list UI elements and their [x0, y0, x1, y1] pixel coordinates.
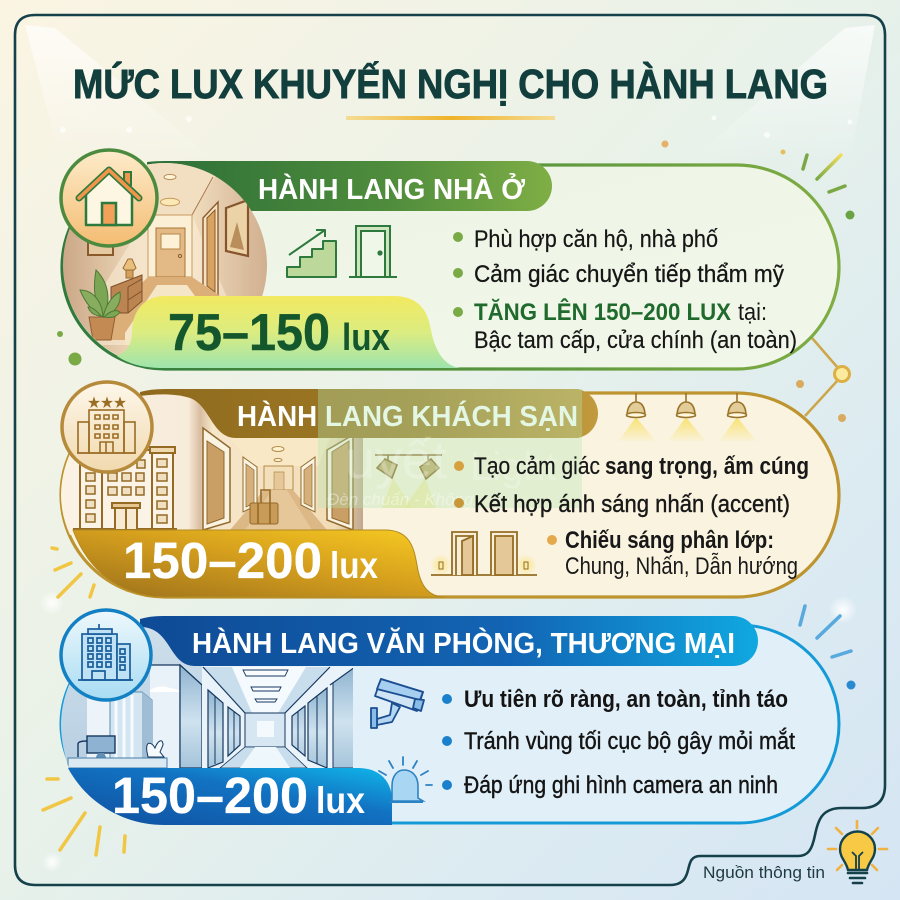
icon: office badge: [61, 610, 151, 700]
header band: [140, 389, 598, 438]
icon: light bulb: [828, 821, 887, 883]
illustration: hotel and hallway: [60, 390, 365, 535]
source label: Nguồn thông tin: [703, 863, 825, 882]
watermark: Light: [470, 445, 557, 489]
header band: [147, 161, 552, 211]
bullet list: Chiếu sáng phân lớp:: [565, 527, 774, 554]
connector between cards: [796, 338, 850, 422]
bullet list: Tránh vùng tối cục bộ gây mỏi mắt: [464, 728, 795, 755]
header text: HÀNH LANG VĂN PHÒNG, THƯƠNG MẠI: [192, 626, 735, 660]
lux value: 150–200: [123, 532, 322, 589]
bullet list: Bậc tam cấp, cửa chính (an toàn): [474, 327, 797, 354]
panel: office and commercial corridor: [60, 610, 839, 825]
icon: doors and sconces: [430, 532, 537, 576]
icon: hotel badge: ★★★: [87, 395, 127, 410]
decoration: blue rays right of card three: [800, 596, 857, 690]
icon: house badge: [61, 150, 157, 246]
title: MỨC LUX KHUYẾN NGHỊ CHO HÀNH LANG: [73, 61, 828, 107]
decoration: gold rays left of card three: [42, 779, 125, 872]
bullet list: tại:: [738, 299, 767, 326]
decoration: green rays top right: [662, 140, 854, 220]
header text: HÀNH LANG KHÁCH SẠN: [237, 399, 578, 433]
card body: [61, 393, 839, 597]
illustration: home hallway: [63, 163, 267, 356]
lux value: lux: [330, 545, 378, 586]
decoration: green dots left: [57, 331, 82, 366]
header band: [140, 616, 758, 666]
title underline: [346, 116, 555, 120]
bullet list: Cảm giác chuyển tiếp thẩm mỹ: [474, 261, 784, 288]
lux value: 150–200: [112, 767, 308, 824]
icon: door: [349, 226, 397, 277]
bullet list: [442, 686, 795, 799]
decoration: gold rays left of card two: [40, 548, 94, 615]
lux band: [73, 530, 445, 597]
card body: [62, 165, 839, 369]
icon: pendant lamps: [617, 393, 758, 443]
bullet list: Đáp ứng ghi hình camera an ninh: [464, 772, 778, 799]
bullet list: [454, 453, 809, 580]
illustration: office hallway: [60, 620, 355, 775]
lux value: 75–150: [168, 304, 330, 362]
bullet list: [453, 226, 797, 354]
spotlights at top corners: [25, 25, 875, 160]
icon: security camera: [371, 679, 424, 728]
panel: residential corridor: [60, 150, 839, 370]
bullet list: sang trọng, ấm cúng: [605, 453, 809, 480]
bullet list: Chung, Nhấn, Dẫn hướng: [565, 553, 798, 580]
lux band: [117, 296, 460, 368]
bullet list: Ưu tiên rõ ràng, an toàn, tỉnh táo: [464, 686, 788, 713]
lux value: lux: [342, 317, 390, 359]
watermark: uyết: [345, 430, 447, 490]
header text: HÀNH LANG NHÀ Ở: [258, 172, 525, 206]
icon: spot lights: [375, 455, 442, 508]
card body: [61, 625, 839, 823]
lux band: [68, 768, 392, 825]
bullet list: Phù hợp căn hộ, nhà phố: [474, 226, 718, 253]
icon: alarm light: [379, 757, 432, 802]
icon: stairs: [287, 230, 336, 277]
lux value: lux: [316, 780, 365, 821]
icon: hotel badge: [62, 382, 152, 472]
bullet list: Tạo cảm giác: [474, 453, 600, 480]
bullet list: Kết hợp ánh sáng nhấn (accent): [474, 491, 790, 518]
bullet list: TĂNG LÊN 150–200 LUX: [474, 298, 731, 326]
panel: hotel corridor: [60, 382, 839, 597]
watermark: [318, 389, 582, 509]
watermark: Đèn chuẩn - Không: [327, 490, 474, 509]
